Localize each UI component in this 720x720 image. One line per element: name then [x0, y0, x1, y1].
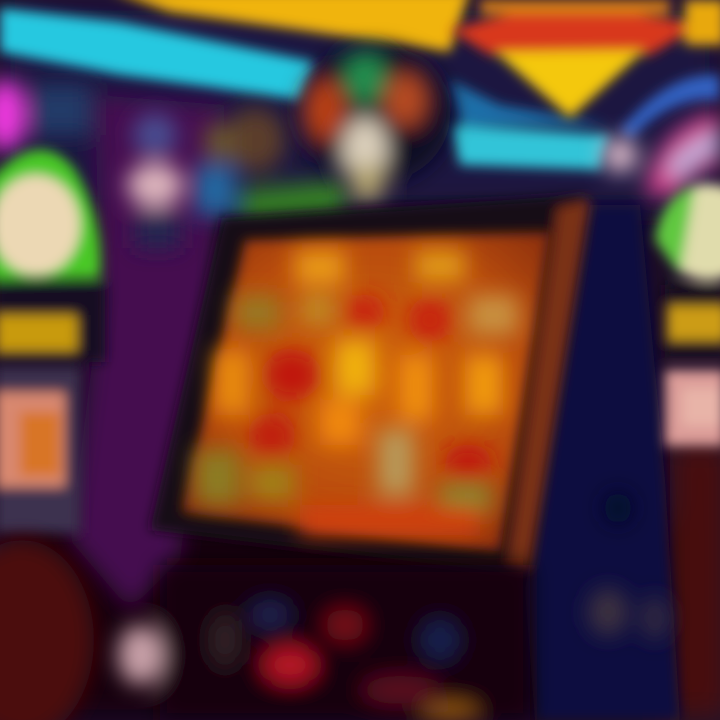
left green bulb — [0, 150, 105, 533]
navy cabinet side — [525, 205, 680, 720]
navy cabinet knobs — [588, 492, 669, 640]
figures above the machine — [127, 108, 345, 248]
right rainbow arc — [602, 112, 720, 195]
control panel buttons — [118, 565, 530, 720]
left signage and purple column — [0, 79, 225, 610]
panel: slot screen — [182, 232, 550, 552]
screen symbols — [195, 250, 518, 535]
dark red seat — [0, 540, 94, 720]
right side signage — [655, 184, 720, 446]
neon bands — [0, 0, 610, 170]
panel: machine screen frame — [150, 195, 590, 575]
top right sign — [450, 0, 720, 140]
top centre wheel — [300, 47, 450, 200]
